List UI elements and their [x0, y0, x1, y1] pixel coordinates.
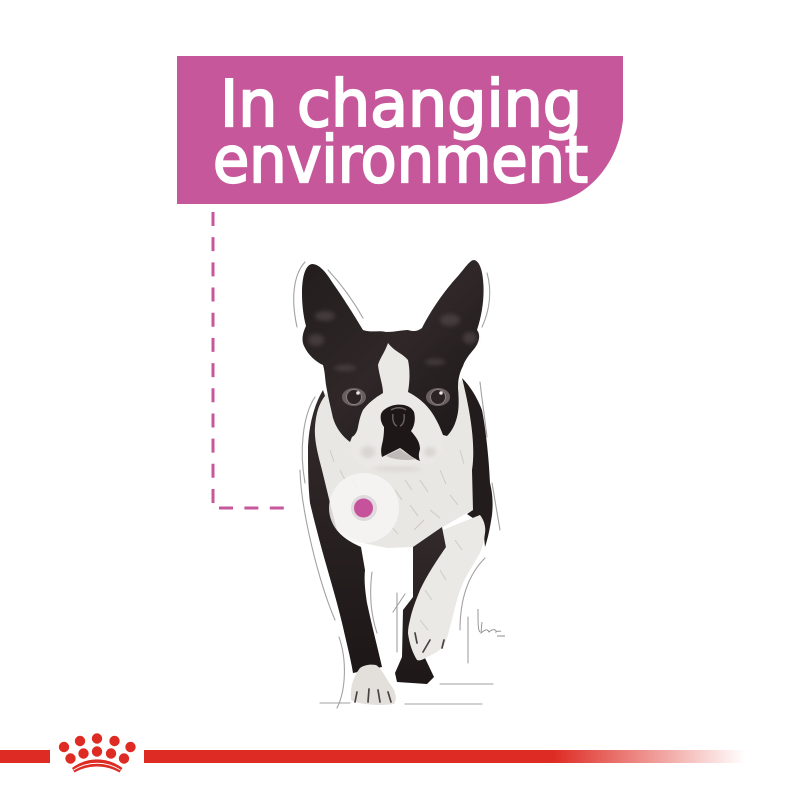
dog signature mark: [478, 609, 505, 636]
heading: In changing environment: environment: [213, 124, 588, 198]
icon: Royal Canin crown logo: [59, 733, 136, 772]
heading: In changing environment: In changing: [220, 68, 582, 142]
dashed connector line: [213, 212, 285, 508]
dog sketch lines: [294, 262, 500, 708]
bottom red line: fading right segment: [144, 750, 745, 763]
dog head and ears dark: [302, 260, 484, 442]
dog nose highlight: [391, 408, 406, 426]
dog muzzle shading: [361, 446, 436, 471]
dog right dark flank: [462, 378, 493, 547]
bottom red line: left segment: [0, 750, 50, 763]
dog mouth: [386, 449, 416, 460]
pink dot: [354, 498, 373, 518]
dog front paw white: [351, 665, 396, 705]
banner: heading panel: [177, 56, 623, 204]
dog ear highlights: [308, 311, 477, 371]
dog raised white paw leg: [408, 515, 485, 660]
dog left eye: [342, 388, 366, 406]
dog white blaze and muzzle: [351, 343, 443, 467]
dog chest fur texture: [330, 450, 464, 630]
dog body white: [310, 380, 485, 548]
dog left dark flank and front leg: [308, 390, 382, 673]
dog right eye: [426, 388, 450, 406]
highlight circle: [329, 473, 399, 543]
dog nose and dark mouth: [381, 405, 420, 461]
dog toe details: [355, 633, 444, 702]
illustration: Boston terrier dog: [294, 260, 505, 708]
dog far dark leg: [395, 527, 446, 684]
